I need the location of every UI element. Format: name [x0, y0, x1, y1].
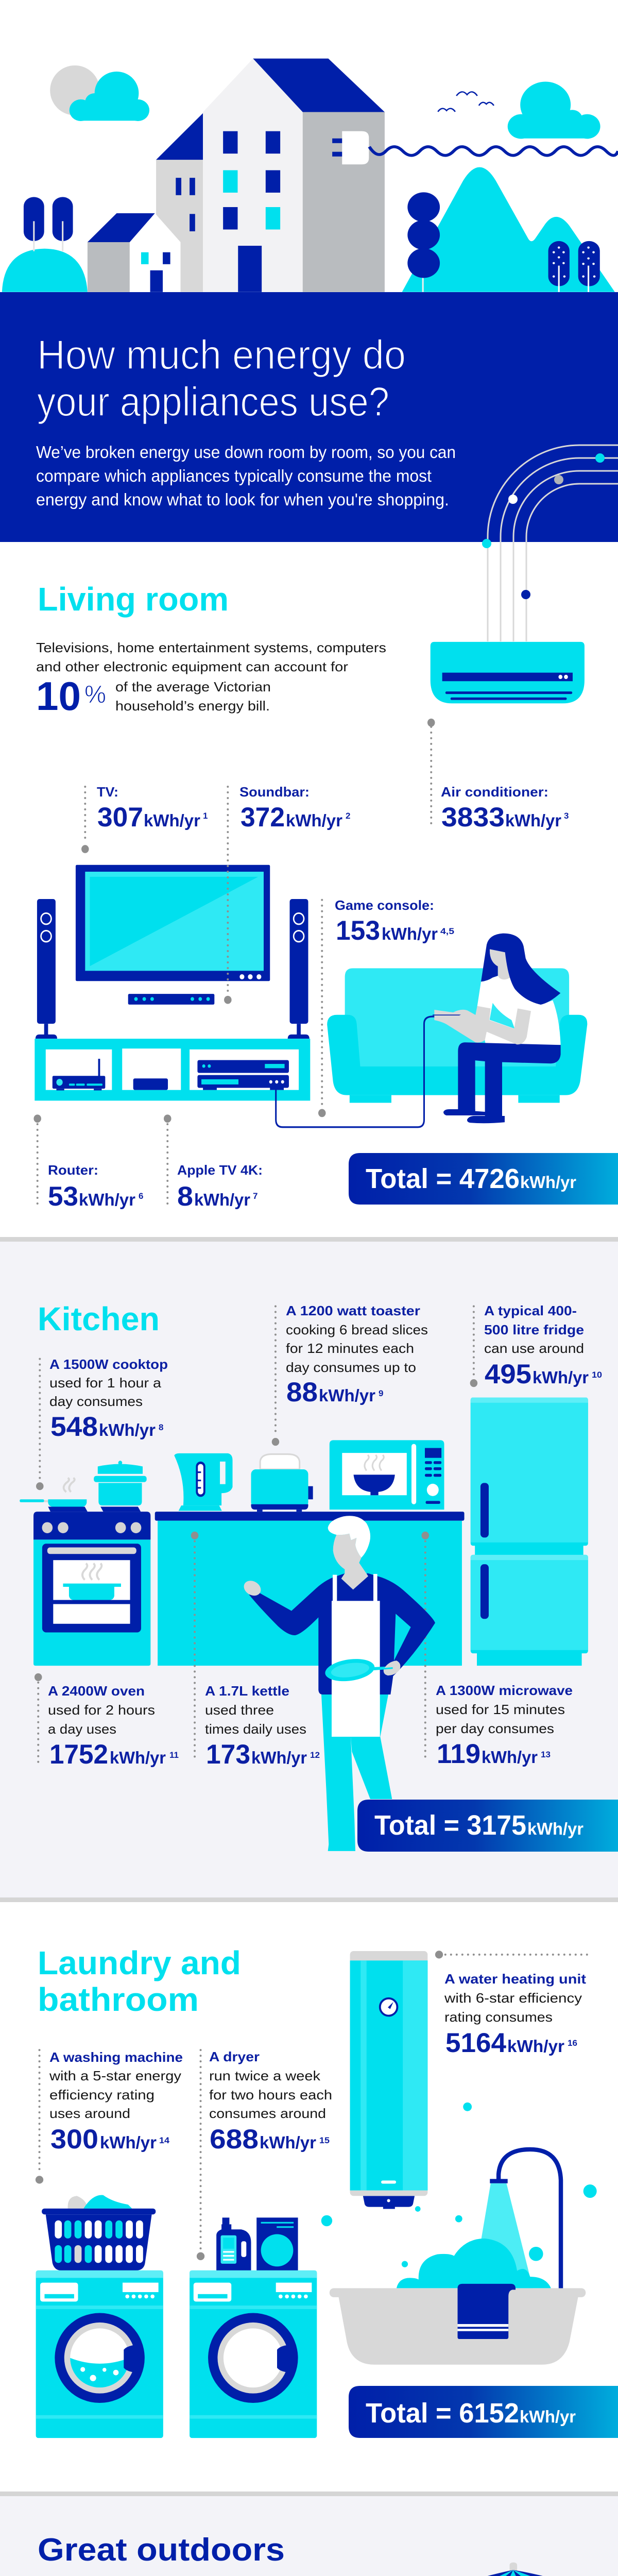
stat: air conditioner: [441, 784, 569, 833]
stat: washing machine: 14: [159, 2136, 170, 2145]
stat: washing machine: with a 5-star energy: [49, 2068, 181, 2083]
text: living room intro with 10%: %: [84, 681, 106, 708]
stat: air conditioner: 3833: [441, 802, 505, 833]
stat: kettle: [205, 1683, 320, 1770]
stat: kettle: kWh/yr: [251, 1748, 307, 1767]
heading: laundry and bathroom: bathroom: [38, 1981, 199, 2018]
stat: cooktop: used for 1 hour a: [49, 1375, 162, 1391]
panel: great outdoors and pool: [0, 2532, 618, 2576]
stat: washing machine: 300: [50, 2124, 98, 2155]
icon: dryer: [190, 2270, 317, 2438]
stat: microwave: 119: [437, 1739, 480, 1769]
icon: game console and player stack: [197, 1060, 289, 1090]
stat: toaster: [286, 1303, 428, 1408]
stat: dryer: run twice a week: [209, 2068, 321, 2083]
stat: oven: 11: [169, 1750, 179, 1760]
text: living room intro with 10%: Televisions, home entertainment systems, computers: [36, 640, 386, 655]
stat: oven: kWh/yr: [110, 1748, 166, 1767]
icon: toaster: [251, 1454, 313, 1512]
intro text: [36, 443, 456, 509]
stat: TV: TV:: [97, 784, 118, 800]
stat: kettle: 173: [206, 1739, 250, 1770]
intro text: energy and know what to look for when you're shopping.: [36, 490, 449, 509]
icon: fridge: [471, 1398, 588, 1666]
stat: air conditioner: kWh/yr: [505, 811, 561, 830]
stat: soundbar: [239, 784, 350, 833]
stat: oven: [48, 1683, 179, 1770]
stat: router: Router:: [48, 1162, 98, 1178]
stat: fridge: 10: [592, 1370, 602, 1380]
icon: mountains: [402, 167, 615, 292]
title: How much energy do: [37, 332, 406, 378]
stat: fridge: A typical 400-: [484, 1303, 577, 1318]
total bar: laundry and bathroom: [349, 2386, 618, 2438]
stat: microwave: per day consumes: [436, 1721, 554, 1736]
stat: kettle: used three: [205, 1702, 274, 1718]
total bar: laundry and bathroom: Total = 6152: [366, 2398, 519, 2429]
stat: apple tv 4k: Apple TV 4K:: [177, 1162, 263, 1178]
stat: dryer: 688: [210, 2124, 259, 2155]
stat: cooktop: day consumes: [49, 1394, 143, 1409]
stat: toaster: 88: [286, 1377, 318, 1408]
stat: kettle: 12: [310, 1750, 320, 1760]
stat: air conditioner: 3: [564, 811, 569, 821]
icon: bathtub with towel: [330, 2284, 586, 2365]
stat: cooktop: 548: [50, 1412, 98, 1442]
stat: dryer: kWh/yr: [260, 2133, 316, 2152]
total bar: living room: [349, 1153, 618, 1205]
icon: right speaker: [288, 899, 310, 1039]
total bar: living room: Total = 4726: [366, 1163, 520, 1194]
icon: birds: [438, 92, 494, 112]
icon: microwave: [330, 1440, 444, 1510]
icon: oven: [33, 1512, 150, 1666]
stat: water heating unit: rating consumes: [444, 2009, 553, 2025]
stat: fridge: 495: [485, 1359, 531, 1389]
stat: air conditioner: Air conditioner:: [441, 784, 548, 800]
stat: toaster: for 12 minutes each: [286, 1341, 414, 1356]
total bar: kitchen: [357, 1800, 618, 1852]
icon: bubbles: [321, 2103, 597, 2267]
hero illustration: houses and landscape: [2, 59, 618, 292]
total bar: kitchen: Total = 3175: [374, 1810, 526, 1841]
stat: water heating unit: kWh/yr: [507, 2037, 564, 2056]
stat: oven: A 2400W oven: [48, 1683, 145, 1699]
stat: game console: kWh/yr: [382, 924, 438, 943]
panel: kitchen: [20, 1300, 618, 1852]
text: living room intro with 10%: household’s energy bill.: [115, 698, 270, 714]
icon: air conditioner: [431, 642, 585, 703]
icon: plug and wavy cable: [332, 131, 618, 164]
icon: bubble bath foam: [397, 2239, 551, 2288]
icon: round tree: [407, 192, 440, 292]
stat: oven: 1752: [49, 1739, 108, 1770]
icon: woman playing games on sofa: [433, 934, 561, 1123]
title: [37, 332, 406, 425]
icon: kettle: [174, 1453, 233, 1511]
stat: cooktop: kWh/yr: [99, 1420, 156, 1439]
stat: TV: kWh/yr: [144, 811, 200, 830]
stat: washing machine: A washing machine: [49, 2049, 183, 2065]
stat: game console: Game console:: [335, 897, 434, 913]
icon: laundry basket: [42, 2195, 156, 2270]
icon: apple tv box: [133, 1078, 168, 1090]
icon: soundbar: [128, 994, 214, 1005]
stat: soundbar: kWh/yr: [286, 811, 342, 830]
icon: router: [53, 1059, 105, 1090]
panel: hero intro band: [0, 292, 618, 542]
stat: router: 53: [48, 1181, 78, 1212]
stat: kettle: times daily uses: [205, 1721, 306, 1737]
stat: game console: 153: [336, 916, 380, 946]
icon: small house: [88, 213, 181, 292]
stat: TV: 307: [97, 802, 143, 833]
stat: washing machine: kWh/yr: [100, 2133, 157, 2152]
icon: sofa: [327, 968, 587, 1103]
stat: apple tv 4k: [177, 1162, 263, 1212]
total bar: living room: kWh/yr: [520, 1173, 576, 1192]
stat: microwave: [436, 1683, 573, 1769]
icon: television: [76, 865, 270, 981]
text: living room intro with 10%: of the average Victorian: [115, 679, 271, 694]
panel: living room: [33, 581, 618, 1212]
stat: dryer: 15: [319, 2136, 330, 2145]
circuit lines joining hero to air conditioner: [482, 445, 618, 641]
stat: microwave: A 1300W microwave: [436, 1683, 573, 1698]
icon: game cable: [276, 1016, 461, 1127]
text: living room intro with 10%: 10: [36, 673, 81, 719]
stat: washing machine: [49, 2049, 183, 2155]
stat: water heating unit: with 6-star efficiency: [444, 1990, 582, 2006]
icon: pan and pot on cooktop: [20, 1461, 147, 1512]
stat: dryer: [209, 2049, 332, 2155]
stat: apple tv 4k: kWh/yr: [194, 1190, 250, 1209]
stat: soundbar: 372: [241, 802, 285, 833]
stat: dryer: for two hours each: [209, 2087, 332, 2103]
stat: apple tv 4k: 8: [177, 1181, 193, 1212]
stat: dryer: consumes around: [209, 2106, 326, 2121]
stat: toaster: kWh/yr: [319, 1386, 375, 1405]
icon: beach umbrella: [367, 2563, 618, 2576]
stat: router: 6: [139, 1191, 143, 1201]
text: living room intro with 10%: [36, 640, 386, 719]
stat: water heating unit: 5164: [445, 2028, 507, 2058]
stat: router: kWh/yr: [79, 1190, 135, 1209]
stat: microwave: kWh/yr: [482, 1748, 538, 1767]
stat: soundbar: Soundbar:: [239, 784, 310, 800]
icon: tall house: [156, 59, 385, 292]
stat: dryer: A dryer: [209, 2049, 260, 2064]
icon: left hill and trees: [2, 197, 88, 292]
stat: oven: a day uses: [48, 1721, 116, 1737]
stat: cooktop: 8: [159, 1422, 163, 1432]
icon: right cloud: [508, 82, 600, 139]
stat: oven: used for 2 hours: [48, 1702, 155, 1718]
icon: dotted trees: [548, 241, 600, 292]
stat: fridge: 500 litre fridge: [484, 1322, 584, 1337]
stat: cooktop: [49, 1357, 168, 1442]
stat: TV: [97, 784, 208, 833]
icon: man cooking with pan: [241, 1516, 435, 1851]
stat: soundbar: 2: [346, 811, 350, 821]
stat: washing machine: uses around: [49, 2106, 130, 2121]
panel: laundry and bathroom: [36, 1944, 618, 2438]
heading: kitchen: Kitchen: [38, 1300, 160, 1337]
total bar: laundry and bathroom: kWh/yr: [520, 2407, 576, 2426]
stat: fridge: can use around: [484, 1341, 584, 1356]
icon: sun and left cloud: [50, 65, 149, 121]
stat: TV: 1: [203, 811, 208, 821]
stat: water heating unit: [444, 1971, 586, 2058]
stat: toaster: A 1200 watt toaster: [286, 1303, 420, 1318]
stat: toaster: day consumes up to: [286, 1360, 416, 1375]
icon: detergent bottle and box: [216, 2217, 298, 2270]
stat: fridge: kWh/yr: [533, 1368, 589, 1387]
stat: microwave: used for 15 minutes: [436, 1702, 565, 1717]
stat: water heating unit: A water heating unit: [444, 1971, 586, 1987]
icon: washing machine: [36, 2270, 163, 2438]
total bar: kitchen: kWh/yr: [527, 1819, 583, 1838]
heading: laundry and bathroom: Laundry and: [38, 1944, 241, 1981]
icon: water heater: [350, 1951, 427, 2209]
intro text: compare which appliances typically consume the most: [36, 466, 432, 485]
intro text: We’ve broken energy use down room by room, so you can: [36, 443, 456, 462]
stat: fridge: [484, 1303, 602, 1389]
stat: toaster: cooking 6 bread slices: [286, 1322, 428, 1337]
title: your appliances use?: [37, 379, 389, 425]
stat: router: [48, 1162, 143, 1212]
stat: washing machine: efficiency rating: [49, 2087, 154, 2103]
stat: kettle: A 1.7L kettle: [205, 1683, 289, 1699]
stat: game console: [335, 897, 454, 946]
heading: living room: Living room: [38, 581, 229, 618]
icon: media cabinet: [35, 1039, 310, 1100]
stat: water heating unit: 16: [568, 2038, 577, 2048]
stat: cooktop: A 1500W cooktop: [49, 1357, 168, 1372]
icon: kitchen counter: [155, 1512, 465, 1666]
stat: apple tv 4k: 7: [253, 1191, 258, 1201]
stat: microwave: 13: [541, 1750, 551, 1759]
heading: laundry and bathroom: [38, 1944, 241, 2018]
stat: toaster: 9: [379, 1388, 383, 1398]
heading: great outdoors: Great outdoors: [38, 2532, 285, 2568]
text: living room intro with 10%: and other electronic equipment can account for: [36, 659, 348, 674]
icon: left speaker: [36, 899, 57, 1039]
stat: game console: 4,5: [440, 926, 454, 936]
icon: shower: [473, 2149, 561, 2291]
